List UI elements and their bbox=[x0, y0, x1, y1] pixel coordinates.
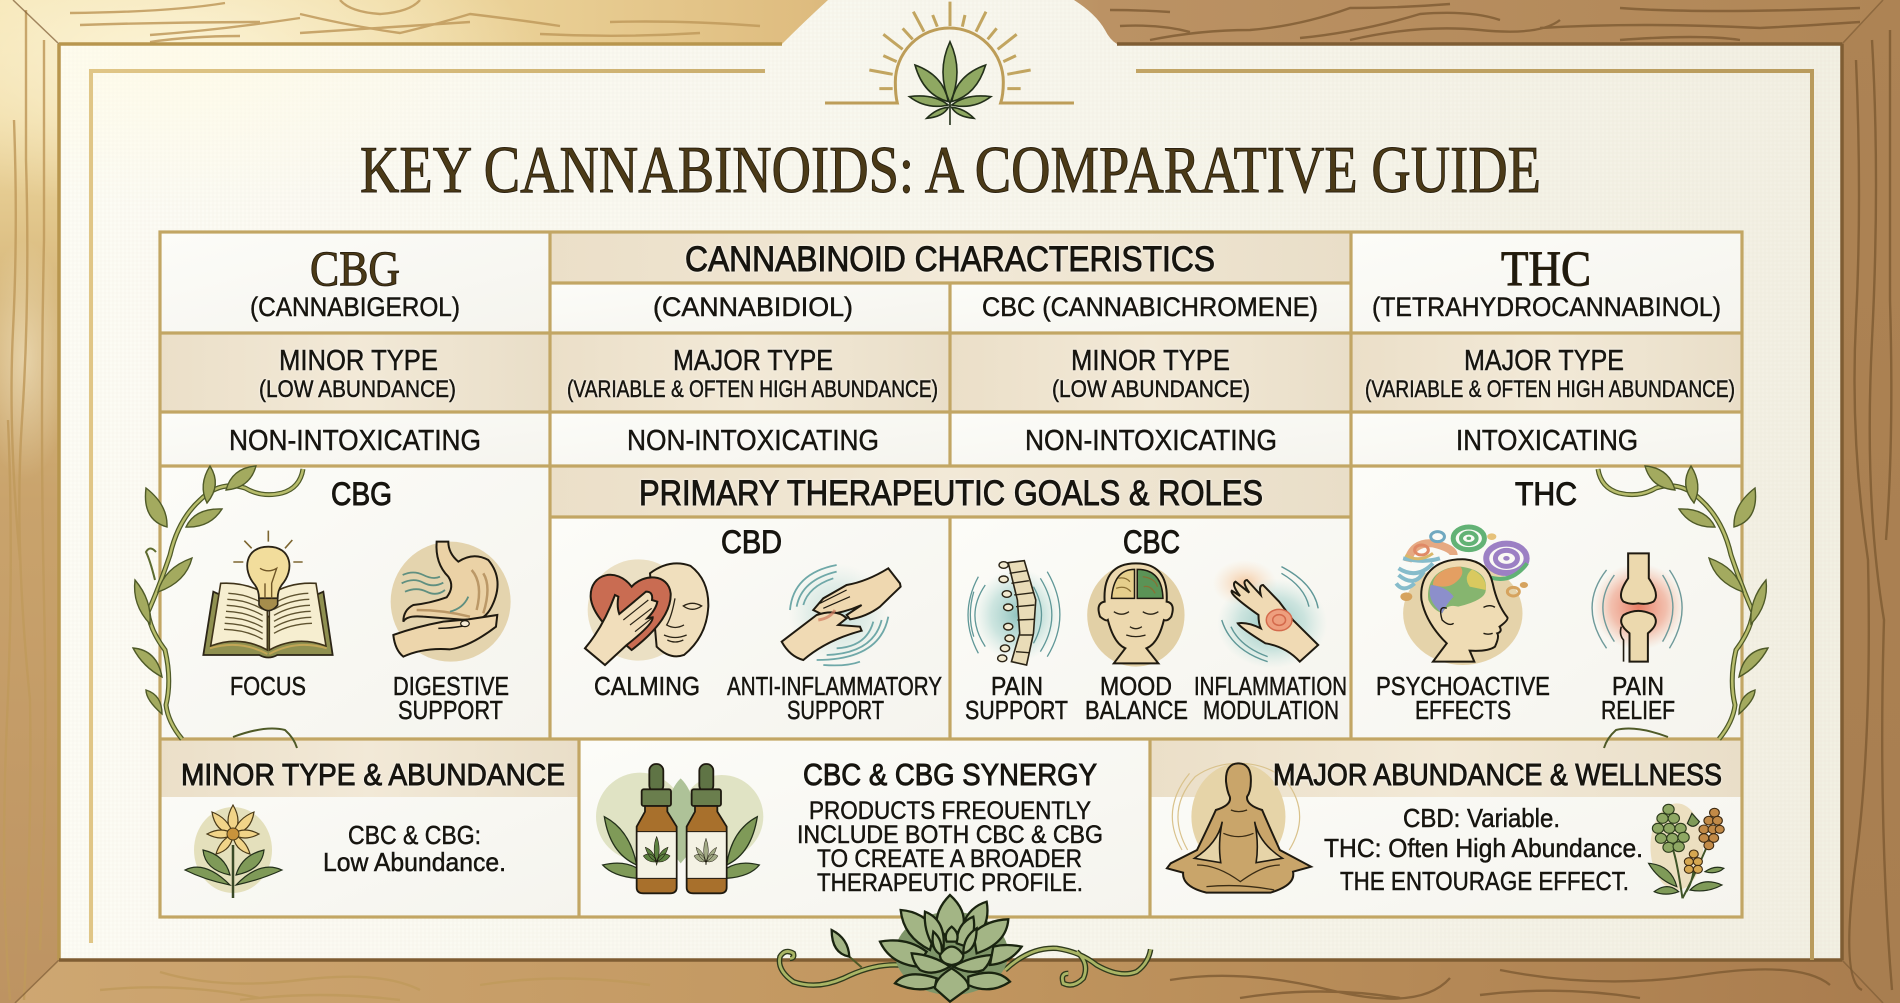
icon: sun and cannabis leaf emblem bbox=[825, 2, 1074, 125]
panel: type row THC bbox=[1351, 333, 1742, 412]
icon: soothing hands bbox=[782, 563, 901, 665]
panel: type row CBD bbox=[550, 333, 950, 412]
text: inflammation modulation: INFLAMMATION bbox=[1194, 671, 1347, 701]
heading: CBG: CBG bbox=[310, 240, 400, 296]
text: pain relief: PAIN bbox=[1612, 671, 1664, 701]
heading: CBC goals: CBC bbox=[1123, 524, 1180, 560]
text: synergy description bbox=[797, 797, 1103, 897]
title: KEY CANNABINOIDS: A COMPARATIVE GUIDE bbox=[360, 133, 1541, 207]
panel header: major abundance bbox=[1150, 739, 1742, 797]
text: major type: MAJOR TYPE bbox=[1464, 345, 1624, 377]
text: intoxicating: INTOXICATING bbox=[1456, 425, 1638, 457]
panel: type row CBG bbox=[159, 333, 550, 412]
text: mood balance: BALANCE bbox=[1085, 695, 1188, 725]
text: minor type: MINOR TYPE bbox=[1071, 345, 1230, 377]
label: cannabichromene: CBC (CANNABICHROMENE) bbox=[982, 292, 1318, 322]
text: digestive support bbox=[393, 671, 509, 725]
heading: primary goals: PRIMARY THERAPEUTIC GOALS & ROLES bbox=[639, 474, 1263, 513]
heading: THC: THC bbox=[1501, 240, 1591, 296]
text: mood balance: MOOD bbox=[1100, 671, 1172, 701]
icon: hand with inflammation swirl bbox=[1213, 560, 1327, 668]
icon: psychoactive head with swirls bbox=[1396, 527, 1528, 665]
text: low abundance note bbox=[323, 820, 506, 877]
text: major type: MAJOR TYPE bbox=[673, 345, 833, 377]
panel: minor type and abundance bbox=[159, 739, 579, 917]
text: digestive support: DIGESTIVE bbox=[393, 671, 509, 701]
text: variable abundance: (VARIABLE & OFTEN HIGH ABUNDANCE) bbox=[1365, 376, 1735, 403]
panel: intoxication row CBD bbox=[550, 412, 950, 466]
panel: CBC goals bbox=[950, 517, 1351, 739]
text: pain support bbox=[965, 671, 1068, 725]
panel: cannabidiol name cell bbox=[550, 283, 950, 333]
text: wellness description: THE ENTOURAGE EFFECT. bbox=[1340, 866, 1629, 896]
text: wellness description bbox=[1324, 803, 1643, 896]
text: non-intoxicating: NON-INTOXICATING bbox=[1025, 425, 1277, 457]
heading: minor type and abundance: MINOR TYPE & ABUNDANCE bbox=[181, 757, 565, 792]
panel header: minor type bbox=[159, 739, 579, 797]
text: anti-inflammatory support: ANTI-INFLAMMATORY bbox=[727, 671, 942, 701]
text: psychoactive effects bbox=[1376, 671, 1550, 725]
panel: intoxication row THC bbox=[1351, 412, 1742, 466]
heading: CBG goals: CBG bbox=[331, 476, 392, 512]
text: calming: CALMING bbox=[594, 671, 700, 701]
text: psychoactive effects: PSYCHOACTIVE bbox=[1376, 671, 1550, 701]
panel: CBG goals bbox=[159, 466, 550, 739]
text: pain relief bbox=[1601, 671, 1675, 725]
panel: cannabinoid characteristics header bbox=[550, 232, 1351, 283]
label: tetrahydrocannabinol: (TETRAHYDROCANNABINOL) bbox=[1372, 292, 1721, 322]
label: cannabigerol: (CANNABIGEROL) bbox=[250, 292, 460, 322]
text: synergy description: INCLUDE BOTH CBC & CBG bbox=[797, 821, 1103, 849]
table grid lines bbox=[160, 232, 1742, 917]
vine: right bbox=[1598, 466, 1768, 748]
text: psychoactive effects: EFFECTS bbox=[1415, 695, 1511, 725]
panel: CBD goals bbox=[550, 517, 950, 739]
panel: CBC name cell bbox=[950, 283, 1351, 333]
text: low abundance note: Low Abundance. bbox=[323, 847, 506, 877]
text: inflammation modulation bbox=[1194, 671, 1347, 725]
icon: spine bbox=[968, 561, 1061, 665]
icon: tincture bottles bbox=[596, 764, 763, 893]
heading: characteristics: CANNABINOID CHARACTERISTICS bbox=[685, 240, 1215, 279]
text: synergy description: PRODUCTS FREOUENTLY bbox=[809, 797, 1091, 825]
panel: CBC and CBG synergy bbox=[579, 739, 1150, 917]
text: pain support: SUPPORT bbox=[965, 695, 1068, 725]
icon: knee joint bbox=[1592, 553, 1685, 662]
icon: book and light bulb bbox=[203, 531, 333, 657]
text: low abundance: (LOW ABUNDANCE) bbox=[1052, 376, 1250, 403]
panel: major abundance and wellness bbox=[1150, 739, 1742, 917]
text: low abundance: (LOW ABUNDANCE) bbox=[259, 376, 456, 403]
icon: yellow flower bbox=[185, 805, 282, 898]
text: wellness description: CBD: Variable. bbox=[1403, 803, 1560, 833]
heading: THC goals: THC bbox=[1515, 476, 1577, 512]
heading: major abundance and wellness: MAJOR ABUNDANCE & WELLNESS bbox=[1273, 757, 1722, 792]
panel: CBG name cell bbox=[159, 232, 550, 333]
text: low abundance note: CBC & CBG: bbox=[348, 820, 481, 850]
text: anti-inflammatory support bbox=[727, 671, 942, 725]
icon: heart and calm face bbox=[585, 559, 708, 665]
text: minor type: MINOR TYPE bbox=[279, 345, 438, 377]
panel: type row CBC bbox=[950, 333, 1351, 412]
text: digestive support: SUPPORT bbox=[398, 695, 503, 725]
text: focus: FOCUS bbox=[230, 671, 306, 701]
heading: CBD goals: CBD bbox=[721, 524, 782, 560]
text: synergy description: THERAPEUTIC PROFILE. bbox=[817, 869, 1083, 897]
icon: green and amber buds bbox=[1649, 803, 1724, 898]
heading: synergy: CBC & CBG SYNERGY bbox=[803, 757, 1097, 792]
panel: intoxication row CBG bbox=[159, 412, 550, 466]
text: wellness description: THC: Often High Abundance. bbox=[1324, 833, 1643, 863]
text: mood balance bbox=[1085, 671, 1188, 725]
icon: stomach in hand bbox=[391, 542, 511, 662]
panel: primary therapeutic goals header bbox=[550, 466, 1351, 517]
text: pain relief: RELIEF bbox=[1601, 695, 1675, 725]
text: pain support: PAIN bbox=[991, 671, 1043, 701]
text: non-intoxicating: NON-INTOXICATING bbox=[229, 425, 481, 457]
icon: mood head bbox=[1087, 563, 1185, 667]
label: cannabidiol: (CANNABIDIOL) bbox=[653, 292, 853, 322]
panel: intoxication row CBC bbox=[950, 412, 1351, 466]
text: variable abundance: (VARIABLE & OFTEN HIGH ABUNDANCE) bbox=[567, 376, 938, 403]
icon: lotus with vines bbox=[779, 895, 1151, 1002]
text: inflammation modulation: MODULATION bbox=[1203, 695, 1339, 725]
text: non-intoxicating: NON-INTOXICATING bbox=[627, 425, 879, 457]
icon: meditating figure bbox=[1167, 763, 1311, 893]
panel: THC goals bbox=[1351, 466, 1742, 739]
panel: THC name cell bbox=[1351, 232, 1742, 333]
text: anti-inflammatory support: SUPPORT bbox=[787, 695, 884, 725]
vine: left bbox=[133, 466, 303, 748]
text: synergy description: TO CREATE A BROADER bbox=[817, 845, 1082, 873]
